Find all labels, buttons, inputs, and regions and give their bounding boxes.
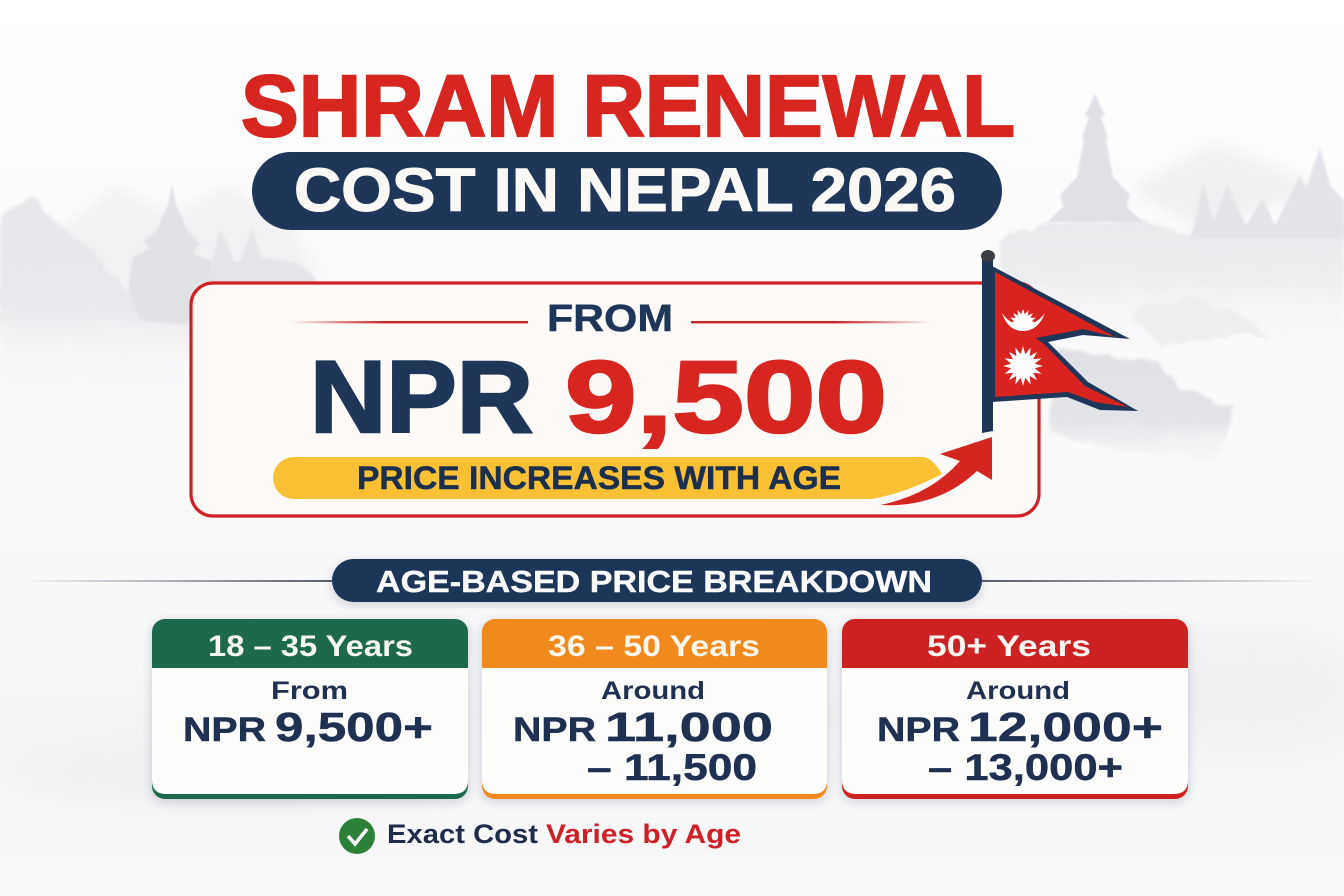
card heading: 36 – 50 Years — [548, 630, 760, 663]
section heading pill — [332, 559, 982, 602]
icon: rising arrow — [880, 437, 992, 505]
background: fading mist at bottom — [0, 630, 1344, 806]
background: misty temple landscape left — [0, 182, 320, 400]
background: misty temple landscape right — [1000, 93, 1344, 462]
card price: NPR — [183, 711, 266, 749]
panel: 50+ years — [842, 619, 1188, 799]
icon: Nepal flag — [981, 250, 1138, 433]
card price: 11,000 — [605, 704, 773, 750]
section heading pill: AGE-BASED PRICE BREAKDOWN — [376, 564, 932, 599]
from divider lines — [290, 321, 931, 323]
title: SHRAM RENEWAL — [241, 58, 1015, 155]
yellow banner: PRICE INCREASES WITH AGE — [357, 460, 841, 496]
flag pole — [982, 258, 993, 433]
yellow banner — [273, 457, 942, 499]
card label: From — [271, 677, 348, 705]
icon: green check — [339, 818, 375, 854]
card price second line: – 11,500 — [587, 747, 757, 788]
flag moon rays — [1009, 309, 1037, 329]
subtitle pill: COST IN NEPAL 2026 — [294, 156, 956, 224]
panel: main price — [191, 283, 1039, 516]
card price: NPR — [513, 711, 596, 749]
price: NPR 9,500: NPR — [310, 340, 533, 454]
panel: 18-35 years — [152, 619, 468, 799]
footer note — [339, 818, 741, 854]
flag sun — [1003, 346, 1043, 386]
card price: 9,500+ — [275, 704, 433, 750]
flag moon — [1002, 313, 1045, 331]
pole knob — [981, 250, 995, 262]
section divider lines — [20, 580, 1322, 582]
from label: FROM — [547, 298, 673, 340]
footer text: Varies by Age — [546, 819, 741, 849]
card price: NPR — [877, 711, 960, 749]
card price: 12,000+ — [968, 704, 1163, 750]
panel: 36-50 years — [482, 619, 827, 799]
card heading: 50+ Years — [927, 630, 1091, 663]
flag pennant — [992, 266, 1138, 411]
card price second line: – 13,000+ — [928, 747, 1123, 788]
price: NPR 9,500: 9,500 — [565, 340, 887, 454]
card heading: 18 – 35 Years — [208, 630, 413, 663]
card label: Around — [601, 677, 705, 705]
card label: Around — [966, 677, 1070, 705]
footer text: Exact Cost — [387, 819, 538, 849]
